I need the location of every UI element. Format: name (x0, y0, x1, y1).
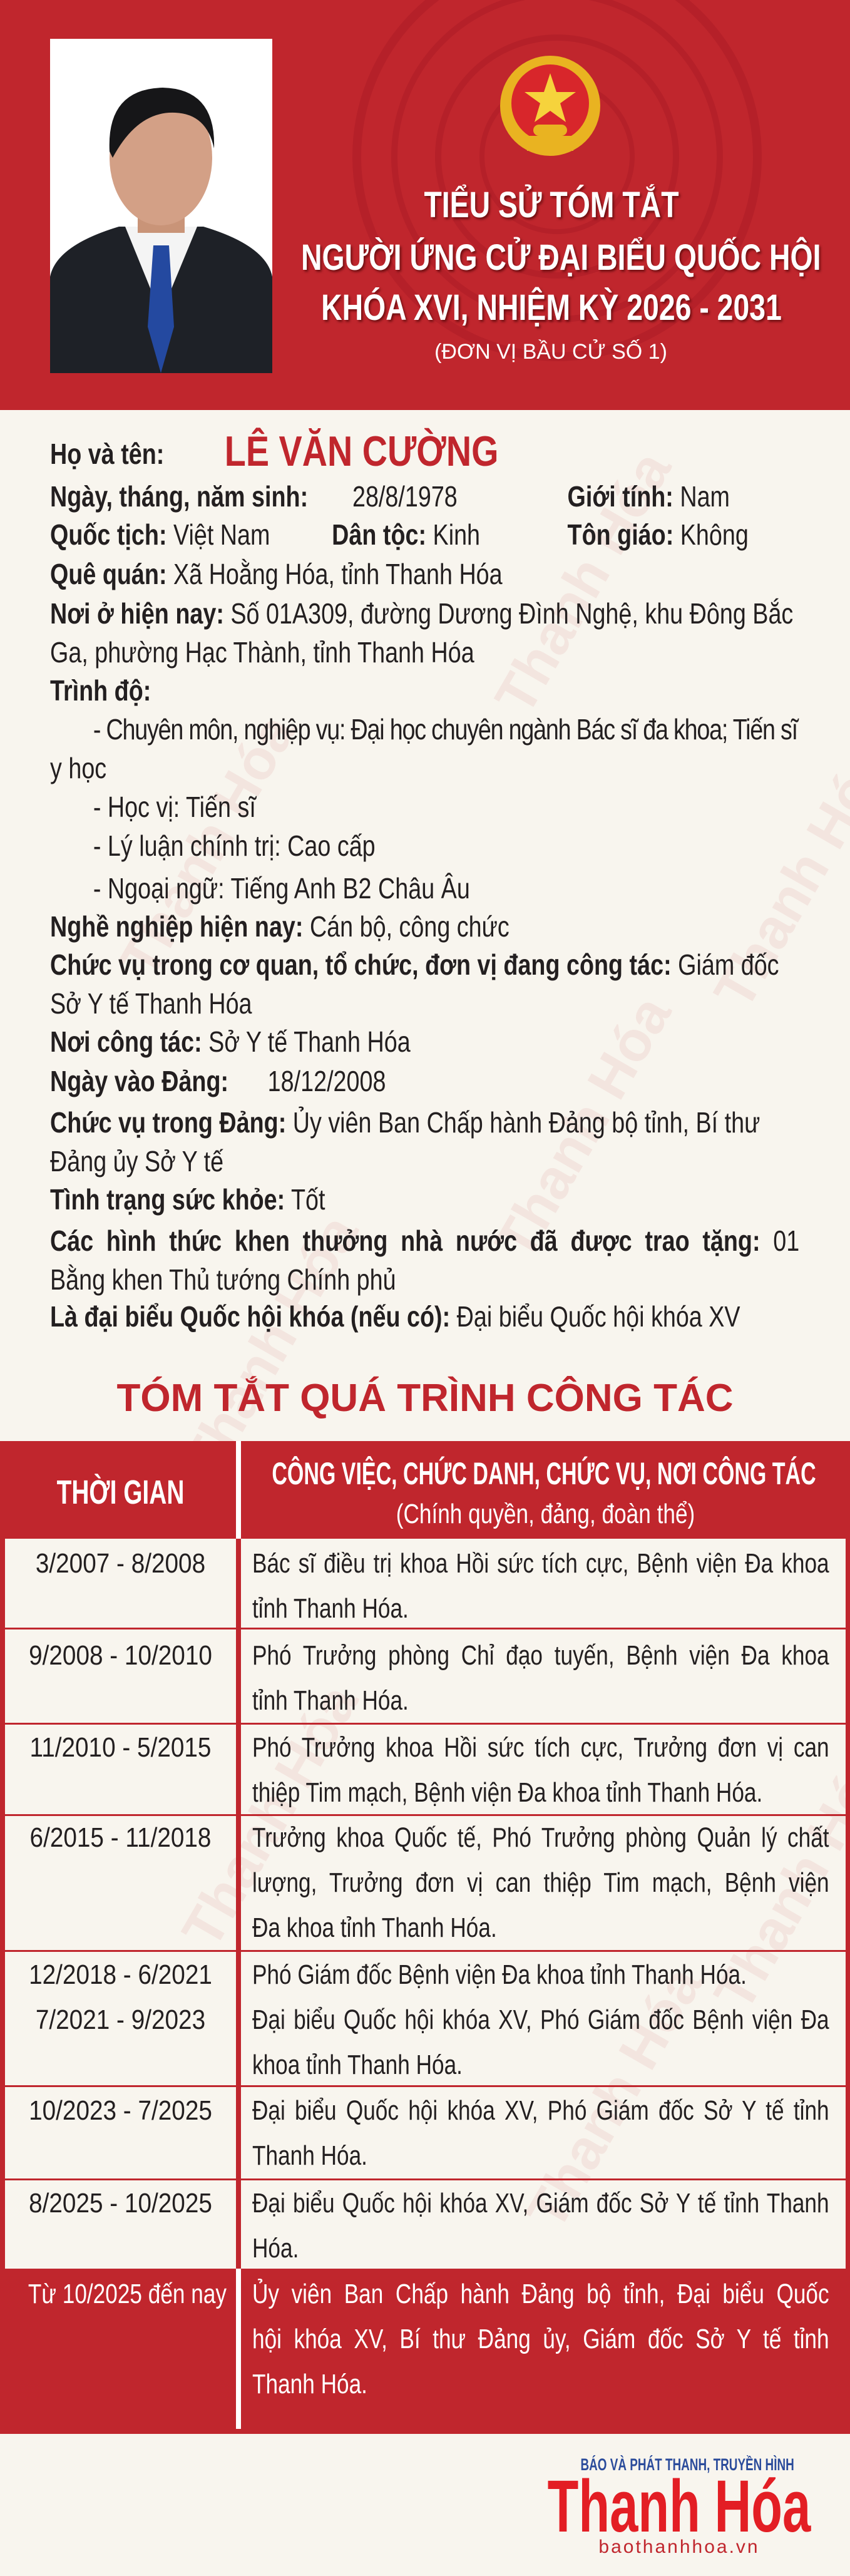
section heading: TÓM TẮT QUÁ TRÌNH CÔNG TÁC (116, 1377, 734, 1420)
row 1: Bác sĩ điều trị khoa Hồi sức tích cực, Bệnh viện Đa khoa (252, 1548, 829, 1579)
row 5: khoa tỉnh Thanh Hóa. (252, 2050, 463, 2080)
row 2: Phó Trưởng phòng Chỉ đạo tuyến, Bệnh viện Đa khoa (252, 1640, 829, 1671)
info: position: Sở Y tế Thanh Hóa (50, 987, 252, 1020)
info: education: y học (50, 752, 106, 784)
row 4: 6/2015 - 11/2018 (30, 1822, 211, 1853)
info: awards: Các hình thức khen thưởng nhà nước đã được trao tặng: 01 (50, 1224, 799, 1257)
info: residence: Ga, phường Hạc Thành, tỉnh Thanh Hóa (50, 636, 474, 669)
row 1: tỉnh Thanh Hóa. (252, 1593, 409, 1624)
info: hometown: Quê quán: Xã Hoằng Hóa, tỉnh Thanh Hóa (50, 558, 503, 590)
info: education (50, 674, 799, 862)
text: Thanh Hóa (171, 1205, 371, 1489)
row 6 (29, 2095, 829, 2171)
info: residence: Nơi ở hiện nay: Số 01A309, đường Dương Đình Nghệ, khu Đông Bắc (50, 597, 793, 630)
row 4: lượng, Trưởng đơn vị can thiệp Tim mạch, Bệnh viện (252, 1867, 829, 1898)
info: name: LÊ VĂN CƯỜNG (225, 428, 499, 475)
info: position (50, 948, 779, 1020)
row 8: current (red): Từ 10/2025 đến nay (28, 2279, 227, 2309)
row 5: Đại biểu Quốc hội khóa XV, Phó Giám đốc Bệnh viện Đa (252, 2004, 829, 2035)
table body borders (0, 1539, 5, 2269)
photo: candidate portrait (50, 39, 272, 373)
info: occupation: Nghề nghiệp hiện nay: Cán bộ, công chức (50, 910, 509, 943)
info: party position: Chức vụ trong Đảng: Ủy viên Ban Chấp hành Đảng bộ tỉnh, Bí thư (50, 1106, 760, 1139)
info: education: - Lý luận chính trị: Cao cấp (93, 829, 376, 862)
row 6: Thanh Hóa. (252, 2140, 367, 2171)
row 4: Trưởng khoa Quốc tế, Phó Trưởng phòng Quản lý chất (252, 1822, 829, 1853)
info: education: - Học vị: Tiến sĩ (93, 791, 256, 823)
info: party date (50, 1065, 386, 1097)
text: Thanh Hóa (171, 1675, 371, 1958)
decorative drum pattern (352, 0, 762, 361)
table: work history (0, 1441, 850, 2434)
info: education: Trình độ: (50, 674, 151, 707)
logo: Thanh Hoa newspaper: Thanh Hóa (548, 2465, 811, 2548)
row 7: Đại biểu Quốc hội khóa XV, Giám đốc Sở Y tế tỉnh Thanh (252, 2188, 829, 2219)
row 8: current (red): Ủy viên Ban Chấp hành Đảng bộ tỉnh, Đại biểu Quốc (252, 2279, 829, 2309)
info: birth & gender (50, 480, 730, 513)
info: nationality (50, 518, 749, 551)
info: NA delegate: Là đại biểu Quốc hội khóa (nếu có): Đại biểu Quốc hội khóa XV (50, 1300, 740, 1333)
title: TIỂU SỬ TÓM TẮT (424, 185, 679, 225)
info: party position (50, 1106, 760, 1178)
row 4 (30, 1822, 829, 1943)
logo: Thanh Hoa newspaper: BÁO VÀ PHÁT THANH, TRUYỀN HÌNH (581, 2455, 794, 2474)
row 7: Hóa. (252, 2233, 299, 2264)
info: education: - Chuyên môn, nghiệp vụ: Đại học chuyên ngành Bác sĩ đa khoa; Tiến sĩ (93, 713, 797, 746)
table header: (Chính quyền, đảng, đoàn thể) (396, 1499, 695, 1529)
text: Thanh Hóa (108, 704, 308, 988)
info: nationality: Quốc tịch: Việt Nam (50, 518, 270, 551)
row 3: 11/2010 - 5/2015 (30, 1732, 211, 1763)
row 7: 8/2025 - 10/2025 (29, 2188, 212, 2219)
info: birth & gender: 28/8/1978 (352, 480, 458, 513)
info: workplace: Nơi công tác: Sở Y tế Thanh Hóa (50, 1025, 411, 1058)
row 3 (30, 1732, 829, 1808)
info: party date: Ngày vào Đảng: (50, 1065, 228, 1097)
info: name: Họ và tên: (50, 438, 164, 470)
logo: Thanh Hoa newspaper: baothanhhoa.vn (598, 2537, 760, 2557)
text: Thanh Hóa (515, 1956, 715, 2240)
row 5: 12/2018 - 6/2021 (29, 1959, 212, 1990)
info: awards: Bằng khen Thủ tướng Chính phủ (50, 1263, 396, 1296)
row 2 (29, 1640, 829, 1716)
info: nationality: Tôn giáo: Không (568, 518, 749, 551)
row 6: Đại biểu Quốc hội khóa XV, Phó Giám đốc Sở Y tế tỉnh (252, 2095, 829, 2126)
subtitle: (ĐƠN VỊ BẦU CỬ SỐ 1) (434, 340, 667, 364)
info: name (50, 428, 499, 475)
watermarks: Thanh Hóa (484, 441, 684, 725)
info: nationality: Dân tộc: Kinh (332, 518, 480, 551)
info: party position: Đảng ủy Sở Y tế (50, 1145, 223, 1178)
header band (0, 0, 850, 410)
title: NGƯỜI ỨNG CỬ ĐẠI BIỂU QUỐC HỘI (301, 237, 821, 278)
table header (0, 1441, 850, 1539)
row 5: Phó Giám đốc Bệnh viện Đa khoa tỉnh Thanh Hóa. (252, 1959, 747, 1990)
info: birth & gender: Ngày, tháng, năm sinh: (50, 480, 308, 513)
row 7 (29, 2188, 829, 2264)
table header: CÔNG VIỆC, CHỨC DANH, CHỨC VỤ, NƠI CÔNG TÁC (272, 1456, 816, 1491)
info: awards (50, 1224, 799, 1296)
table header: THỜI GIAN (57, 1474, 184, 1511)
row 5: 7/2021 - 9/2023 (36, 2004, 205, 2035)
title (301, 184, 822, 329)
text: Thanh Hóa (484, 986, 684, 1270)
row 2: 9/2008 - 10/2010 (29, 1640, 212, 1671)
info: residence (50, 597, 793, 669)
row 1: 3/2007 - 8/2008 (36, 1548, 205, 1579)
row 4: Đa khoa tỉnh Thanh Hóa. (252, 1912, 497, 1943)
row 6: 10/2023 - 7/2025 (29, 2095, 212, 2126)
row 8: current (red) (0, 2269, 850, 2434)
row 3: thiệp Tim mạch, Bệnh viện Đa khoa tỉnh Thanh Hóa. (252, 1777, 762, 1808)
info: language: - Ngoại ngữ: Tiếng Anh B2 Châu Âu (93, 872, 470, 905)
row 8: current (red): hội khóa XV, Bí thư Đảng ủy, Giám đốc Sở Y tế tỉnh (252, 2324, 829, 2354)
row 2: tỉnh Thanh Hóa. (252, 1685, 409, 1716)
row 1 (36, 1548, 829, 1624)
row 3: Phó Trưởng khoa Hồi sức tích cực, Trưởng đơn vị can (252, 1732, 829, 1763)
title: KHÓA XVI, NHIỆM KỲ 2026 - 2031 (321, 287, 782, 328)
info: position: Chức vụ trong cơ quan, tổ chức, đơn vị đang công tác: Giám đốc (50, 948, 779, 981)
icon: national emblem (500, 56, 600, 156)
info: birth & gender: Giới tính: Nam (568, 480, 730, 513)
info: health: Tình trạng sức khỏe: Tốt (50, 1183, 325, 1216)
info: party date: 18/12/2008 (268, 1065, 386, 1097)
row 5 (29, 1959, 829, 2080)
row 8: current (red): Thanh Hóa. (252, 2369, 367, 2399)
